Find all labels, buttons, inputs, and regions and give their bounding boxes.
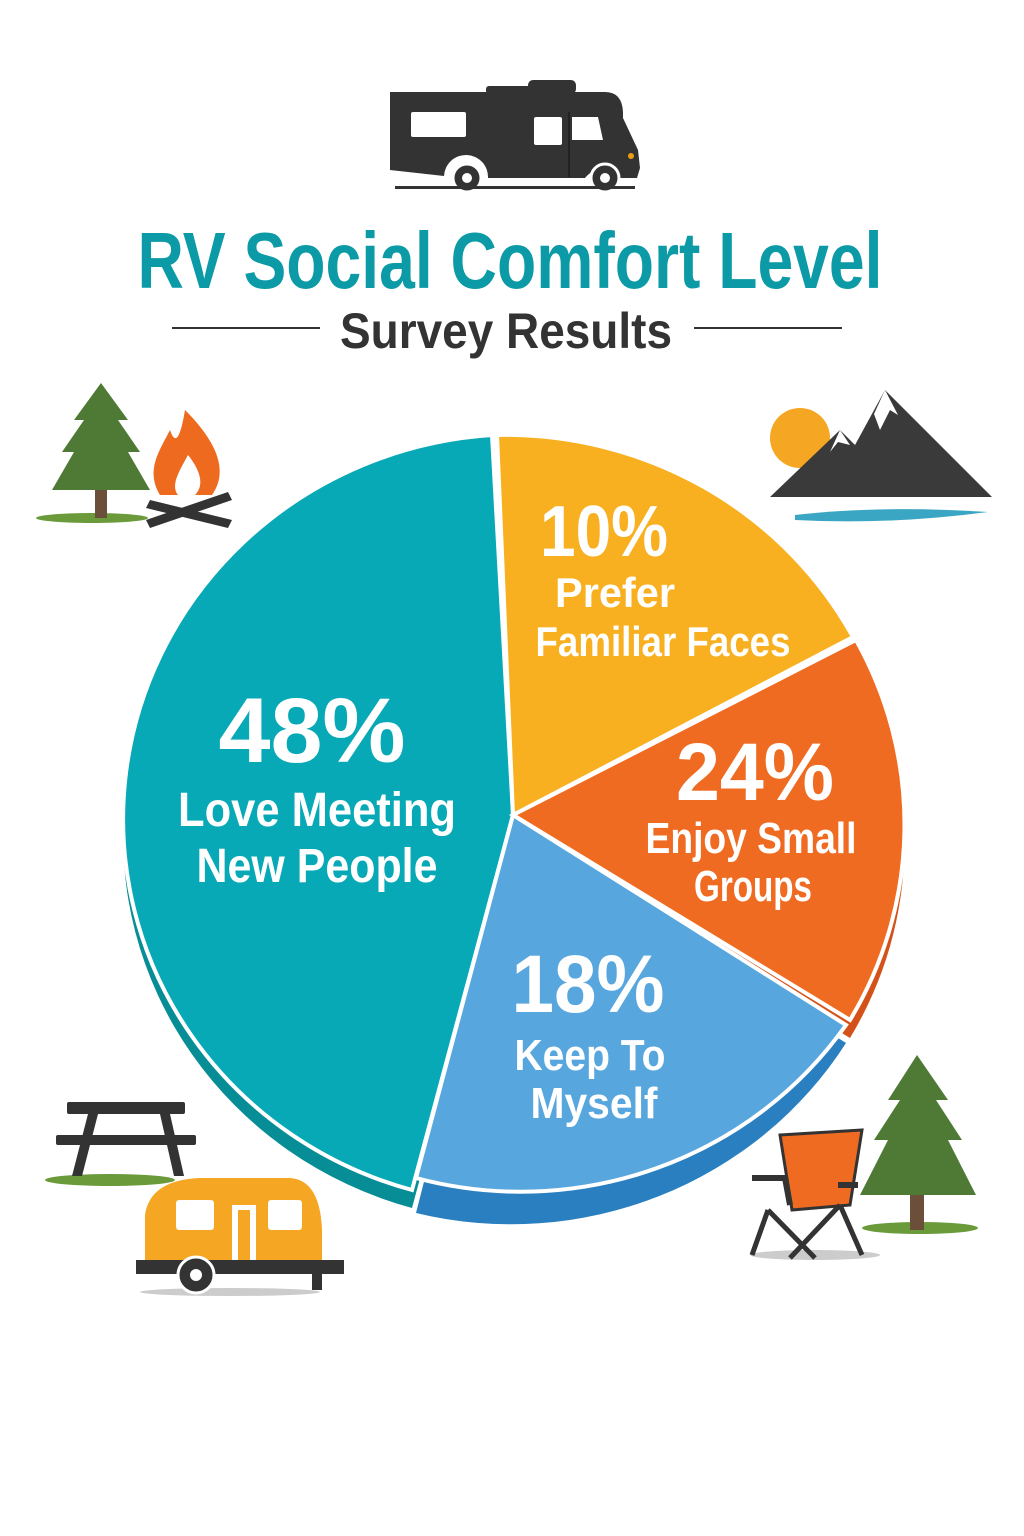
label: 48%: New People [196, 840, 438, 893]
label: 24%: Enjoy Small [646, 814, 856, 863]
label: 10% [536, 492, 790, 665]
slice: 24% orange [513, 640, 905, 1020]
label: 48%: Love Meeting [178, 784, 456, 837]
label: 18%: 18% [512, 939, 664, 1030]
icon: picnic table [45, 1102, 196, 1186]
label: 18%: Keep To [514, 1031, 666, 1080]
slice: 18% blue [416, 815, 846, 1192]
icon: mountains with sun [770, 390, 992, 521]
slice: 10% yellow [497, 435, 853, 815]
label: 24% [646, 727, 856, 911]
icon: camp chair and tree [750, 1055, 978, 1260]
label: 10%: Prefer [555, 569, 675, 616]
pie chart [123, 435, 905, 1224]
label: 24%: Groups [694, 862, 812, 911]
label: 10%: Familiar Faces [536, 618, 790, 665]
label: 48% [178, 680, 456, 893]
pie depth shadow [123, 453, 905, 1224]
label: 10%: 10% [540, 492, 668, 572]
label: 18%: Myself [530, 1079, 658, 1128]
label: 24%: 24% [676, 727, 834, 818]
slice: 48% teal [123, 435, 513, 1190]
subtitle: Survey Results [340, 303, 672, 359]
icon: camper trailer [136, 1178, 344, 1296]
icon: RV motorhome [390, 80, 640, 192]
icon: pine tree and campfire [36, 383, 232, 528]
label: 18% [512, 939, 666, 1128]
label: 48%: 48% [218, 680, 406, 782]
